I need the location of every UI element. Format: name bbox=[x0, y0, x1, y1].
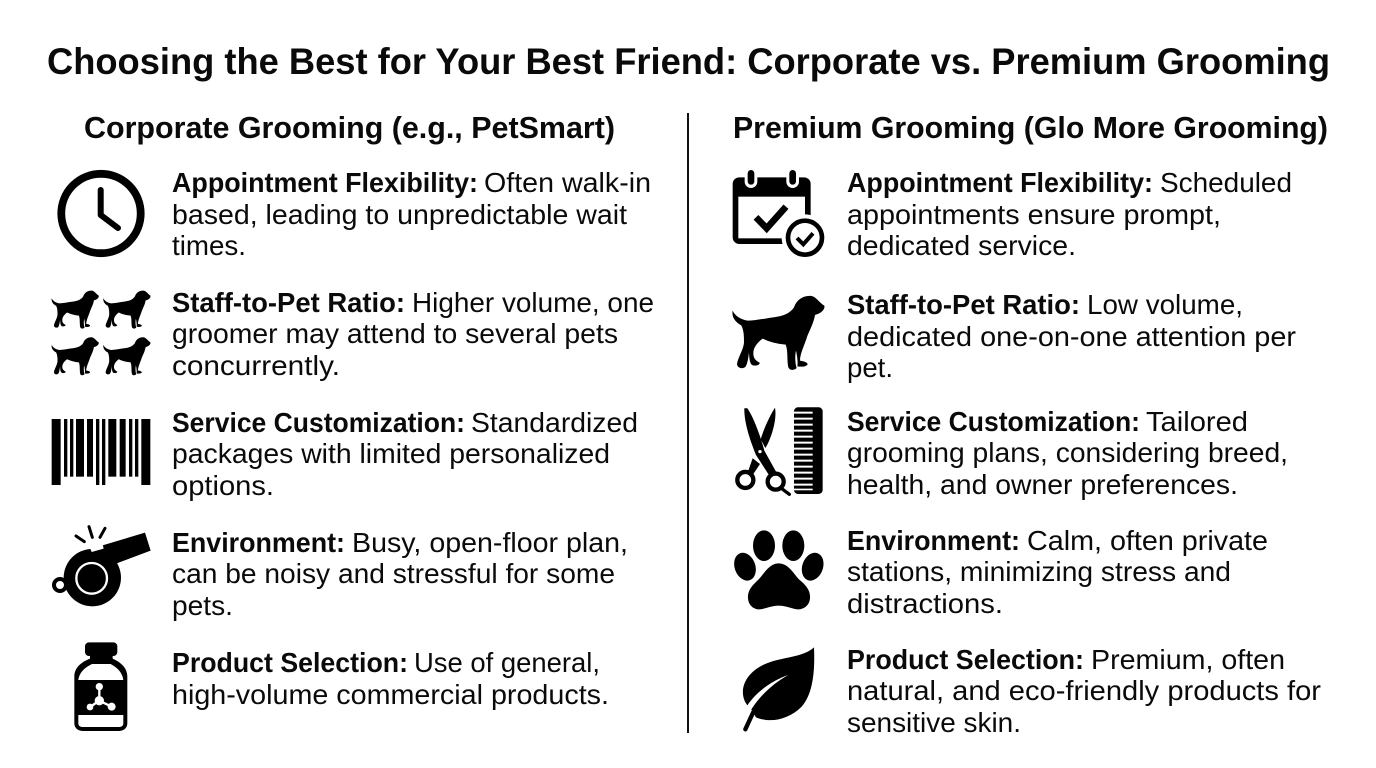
text: product selection: high-volume commercial products. bbox=[172, 679, 609, 710]
text: appointment flexibility bbox=[172, 167, 651, 261]
text: service customization: grooming plans, considering breed, bbox=[847, 437, 1288, 468]
text: environment: distractions. bbox=[847, 588, 1003, 619]
icon: calendar with check bbox=[733, 167, 828, 261]
text: service customization: Service Customization: bbox=[172, 407, 465, 438]
text: product selection: Premium, often bbox=[1091, 644, 1285, 675]
text: staff-to-pet ratio bbox=[172, 287, 654, 381]
icon: leaf bbox=[743, 647, 814, 729]
text: staff-to-pet ratio: Staff-to-Pet Ratio: bbox=[847, 289, 1080, 320]
text: appointment flexibility: times. bbox=[172, 230, 246, 261]
text: product selection bbox=[847, 644, 1321, 738]
text: staff-to-pet ratio: Higher volume, one bbox=[412, 287, 654, 318]
text: product selection: Product Selection: bbox=[847, 644, 1084, 675]
heading: corporate grooming: Corporate Grooming (e.g., PetSmart) bbox=[84, 110, 615, 145]
text: environment: Environment: bbox=[172, 527, 345, 558]
text: appointment flexibility: appointments ensure prompt, bbox=[847, 199, 1221, 230]
text: appointment flexibility: Appointment Flexibility: bbox=[172, 167, 478, 198]
text: environment: Environment: bbox=[847, 525, 1020, 556]
text: service customization bbox=[847, 406, 1288, 500]
heading: premium grooming: Premium Grooming (Glo More Grooming) bbox=[733, 110, 1328, 145]
text: service customization: Tailored bbox=[1146, 406, 1248, 437]
icon: barcode bbox=[52, 419, 150, 485]
text: environment: can be noisy and stressful for some bbox=[172, 558, 615, 589]
text: environment: stations, minimizing stress and bbox=[847, 556, 1231, 587]
text: environment: Busy, open-floor plan, bbox=[352, 527, 628, 558]
title: Choosing the Best for Your Best Friend: Corporate vs. Premium Grooming bbox=[47, 41, 1330, 82]
text: product selection bbox=[172, 647, 609, 710]
text: appointment flexibility: Scheduled bbox=[1160, 167, 1292, 198]
text: appointment flexibility: Often walk-in bbox=[484, 167, 651, 198]
center divider bbox=[687, 113, 689, 733]
text: service customization: Service Customization: bbox=[847, 406, 1140, 437]
icon: four dogs bbox=[52, 291, 151, 375]
text: staff-to-pet ratio: groomer may attend to several pets bbox=[172, 318, 618, 349]
text: appointment flexibility: Appointment Flexibility: bbox=[847, 167, 1153, 198]
text: staff-to-pet ratio: dedicated one-on-one attention per bbox=[847, 321, 1296, 352]
icon: clock bbox=[61, 174, 141, 253]
text: product selection: sensitive skin. bbox=[847, 707, 1021, 738]
panel: corporate grooming bbox=[52, 110, 654, 731]
text: staff-to-pet ratio: Low volume, bbox=[1087, 289, 1243, 320]
text: environment: pets. bbox=[172, 590, 233, 621]
text: environment bbox=[172, 527, 628, 621]
icon: dog bbox=[732, 296, 824, 370]
text: staff-to-pet ratio: concurrently. bbox=[172, 350, 340, 381]
text: service customization: health, and owner preferences. bbox=[847, 469, 1238, 500]
text: appointment flexibility: based, leading to unpredictable wait bbox=[172, 199, 627, 230]
text: staff-to-pet ratio bbox=[847, 289, 1296, 383]
text: environment: Calm, often private bbox=[1027, 525, 1268, 556]
text: staff-to-pet ratio: Staff-to-Pet Ratio: bbox=[172, 287, 405, 318]
icon: paw print bbox=[730, 530, 827, 609]
text: appointment flexibility bbox=[847, 167, 1292, 261]
text: service customization: packages with limited personalized bbox=[172, 438, 610, 469]
text: environment bbox=[847, 525, 1268, 619]
text: product selection: natural, and eco-friendly products for bbox=[847, 675, 1321, 706]
text: service customization bbox=[172, 407, 638, 501]
text: service customization: options. bbox=[172, 470, 274, 501]
icon: whistle bbox=[54, 527, 151, 606]
text: product selection: Product Selection: bbox=[172, 647, 408, 678]
text: product selection: Use of general, bbox=[414, 647, 600, 678]
text: staff-to-pet ratio: pet. bbox=[847, 352, 893, 383]
panel: premium grooming bbox=[730, 110, 1328, 738]
text: service customization: Standardized bbox=[471, 407, 638, 438]
icon: scissors and comb bbox=[737, 407, 823, 494]
text: appointment flexibility: dedicated service. bbox=[847, 230, 1076, 261]
icon: product bottle bbox=[74, 642, 127, 731]
